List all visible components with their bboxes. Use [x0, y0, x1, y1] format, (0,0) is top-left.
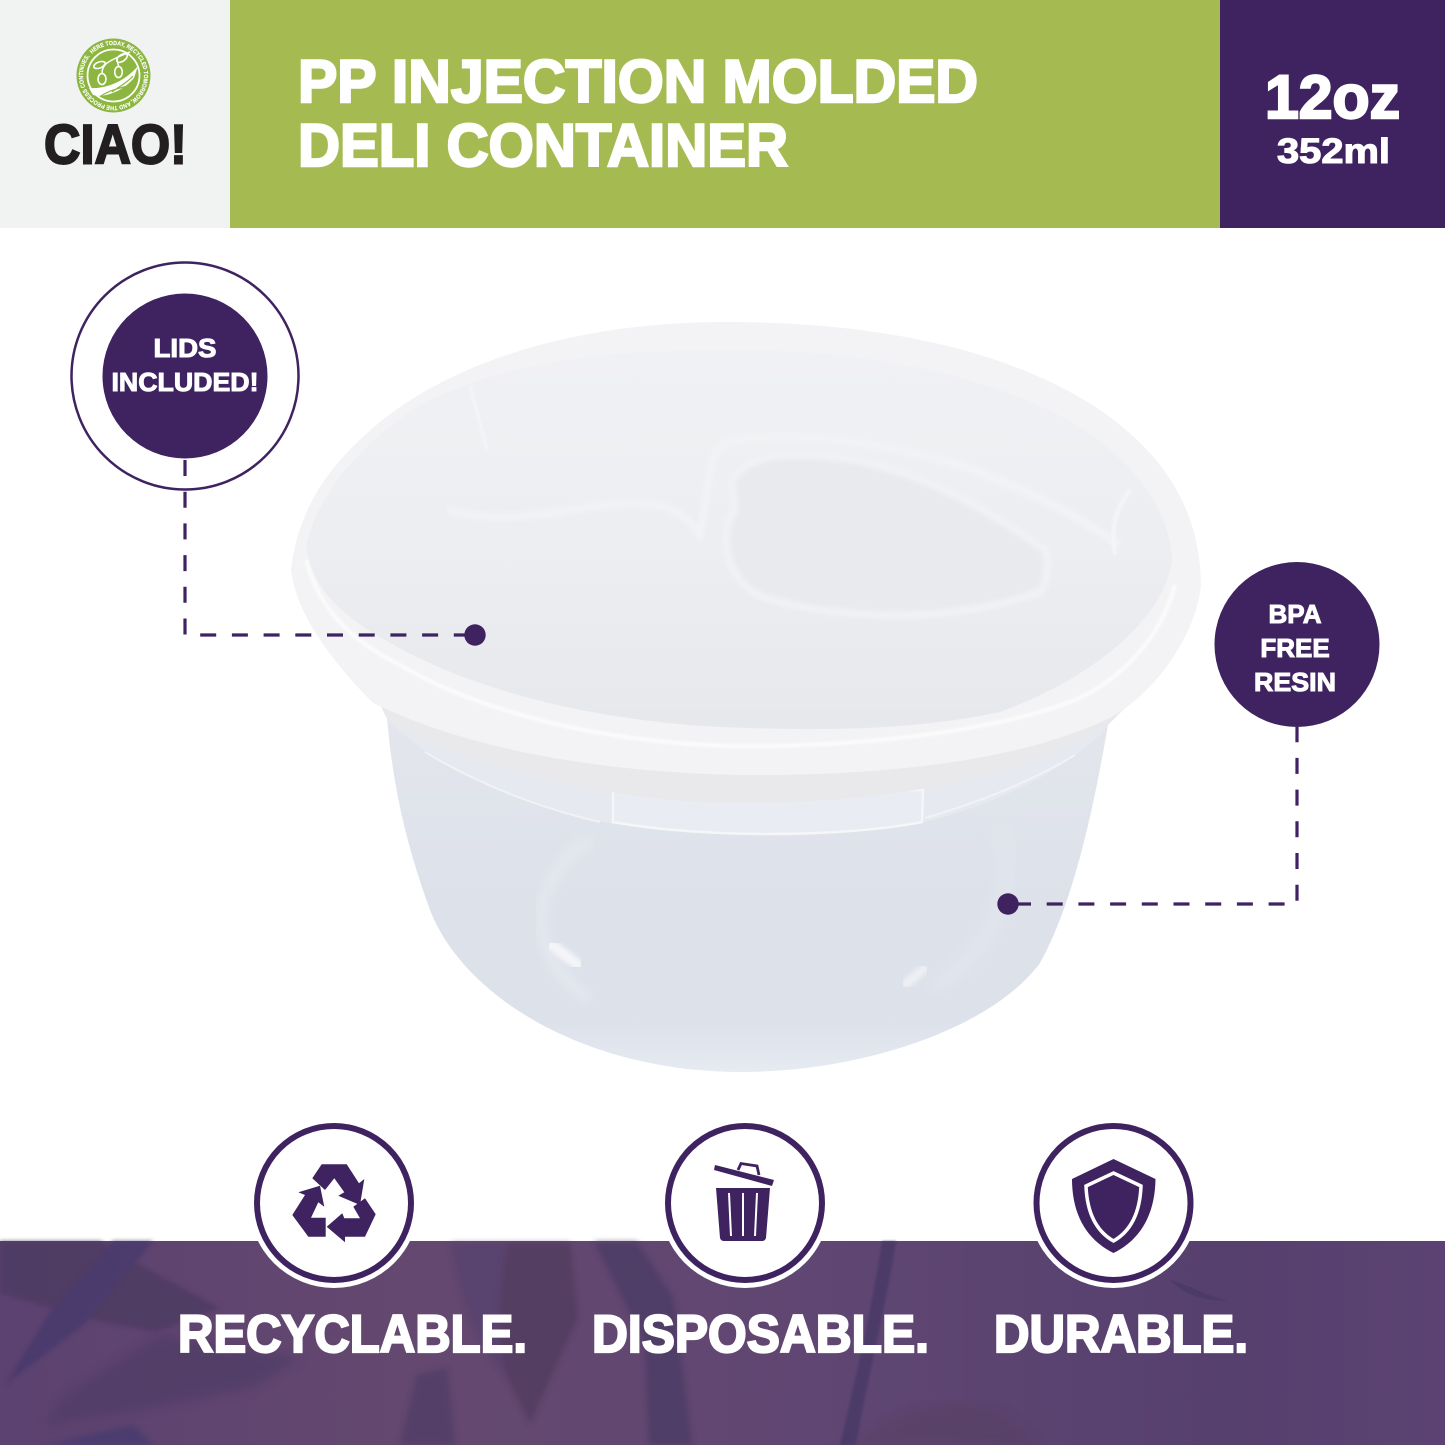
callout text: BPA [1269, 599, 1322, 629]
feature: recyclable [178, 1118, 527, 1364]
lid [291, 322, 1201, 775]
callout text [112, 333, 258, 397]
title: PP INJECTION MOLDED [298, 48, 978, 115]
connector dot [997, 893, 1019, 915]
size millilitres: 352ml [1277, 132, 1390, 171]
title [298, 48, 978, 179]
callout text: FREE [1260, 633, 1330, 663]
lid recess [726, 455, 1047, 615]
icon badge: recycling arrows [249, 1118, 419, 1288]
collar [387, 720, 1108, 824]
callout ring [72, 262, 298, 490]
container rim [373, 690, 1133, 803]
callout: lids included [72, 262, 486, 646]
size panel [1220, 0, 1445, 228]
feature label: DURABLE. [994, 1305, 1248, 1364]
feature label: RECYCLABLE. [178, 1305, 527, 1364]
title panel [230, 0, 1220, 228]
dashed connector [185, 460, 468, 635]
title: DELI CONTAINER [298, 112, 788, 179]
size ounces: 12oz [1265, 63, 1400, 131]
icon: olive recycling seal: HERE TODAY, RECYCLED TOMORROW, AND THE PROCESS CONTINUES. [78, 40, 148, 110]
product: deli container with lid [291, 322, 1201, 1072]
callout text: INCLUDED! [112, 367, 258, 397]
feature: disposable [592, 1118, 929, 1364]
connector dot [464, 624, 486, 646]
lid inner panel [306, 350, 1172, 729]
callout badge [1214, 562, 1380, 727]
container body [387, 718, 1108, 1072]
bottom feature band [0, 1118, 1445, 1445]
header [0, 0, 1445, 228]
icon badge: trash can [660, 1118, 830, 1288]
logo panel [0, 0, 230, 228]
callout text: LIDS [154, 333, 216, 363]
pull tab [613, 790, 923, 834]
callout text [1254, 599, 1336, 697]
callout text: RESIN [1254, 667, 1336, 697]
callout: BPA free resin [997, 562, 1380, 915]
icon badge: shield [1028, 1118, 1198, 1288]
dashed connector [1015, 727, 1297, 904]
logo wordmark: CIAO! [44, 112, 187, 176]
feature: durable [994, 1118, 1248, 1364]
feature label: DISPOSABLE. [592, 1305, 929, 1364]
callout badge [102, 294, 268, 458]
lid outer edge [291, 322, 1201, 775]
leaf texture [0, 1241, 1228, 1445]
